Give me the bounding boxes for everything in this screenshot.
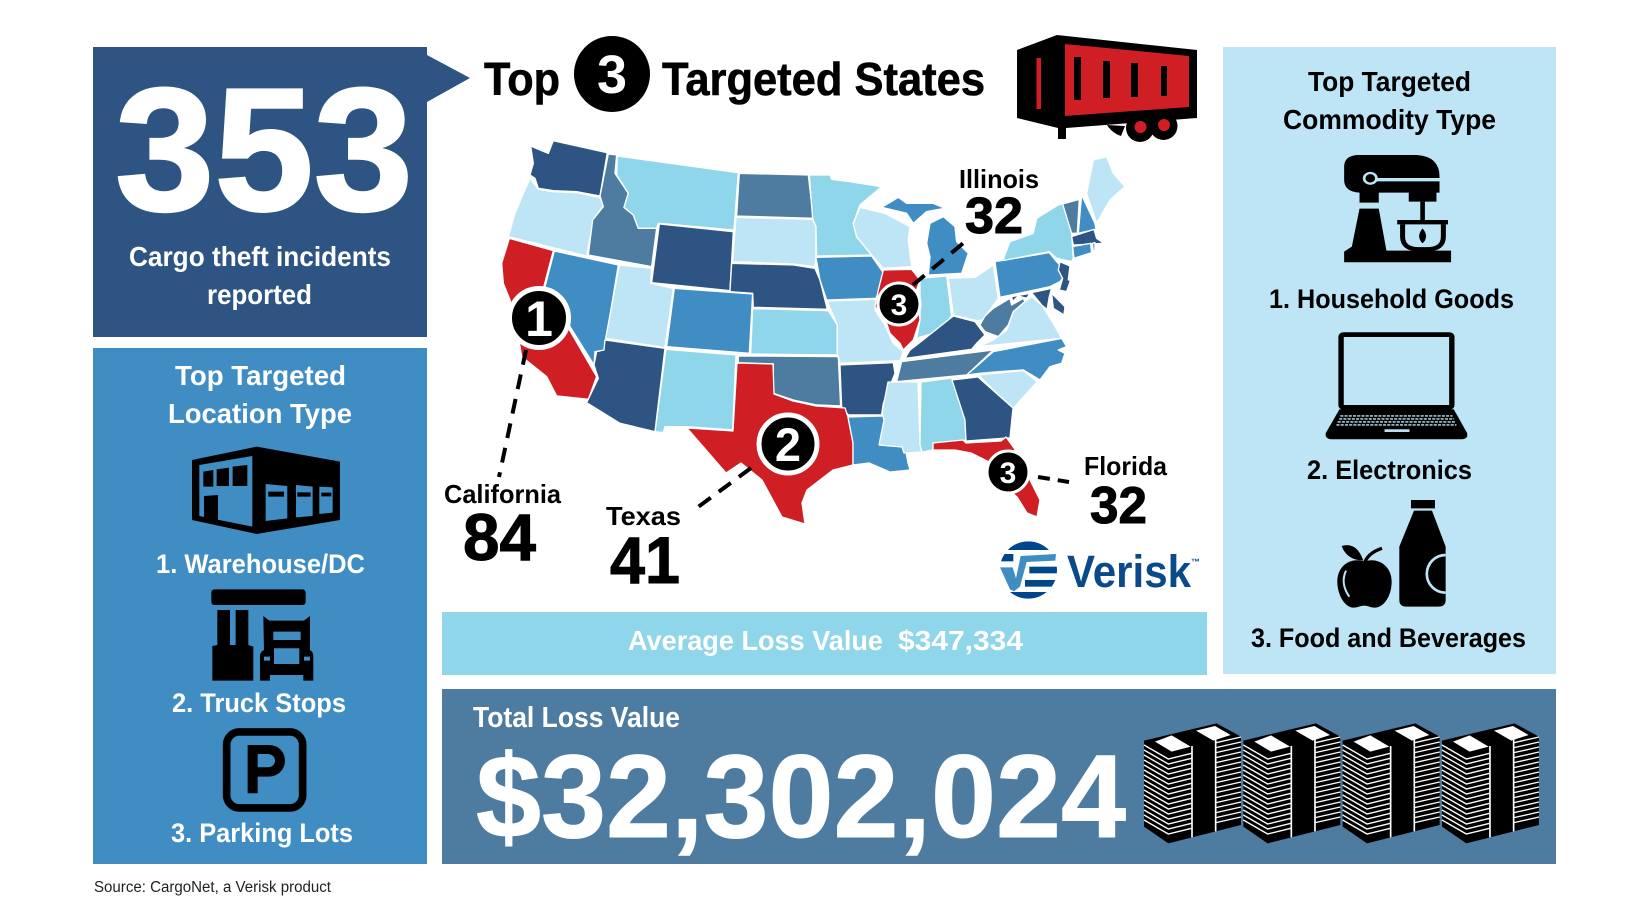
state: Kentucky [905,316,985,358]
commodity item 2: 2. Electronics [1307,455,1472,485]
callout: California: California [444,479,562,509]
state: Texas [687,363,853,524]
leader line: Florida [1038,477,1069,482]
callout: Florida: 32 [1090,477,1147,535]
state: New Hampshire [1078,195,1096,233]
callout: Texas: 41 [610,523,680,597]
state: Oklahoma [738,356,841,406]
callout: Florida [1084,451,1168,535]
state: New Mexico [655,349,736,433]
callout: Texas: Texas [606,501,681,531]
callout: Florida: Florida [1084,451,1168,481]
state: Wyoming [652,224,733,291]
title number badge: 3 [597,45,627,105]
state: Nebraska [730,263,827,309]
state: Florida [933,437,1040,517]
panel: average loss value [442,612,1207,675]
panel: top targeted commodity type [1223,47,1556,674]
location heading: Top Targeted [175,360,346,391]
incidents caption: Cargo theft incidents [129,241,391,272]
icon: laptop [1326,335,1467,439]
state: Colorado [667,288,753,353]
state: Rhode Island [1092,243,1095,251]
map of US states [502,141,1125,524]
location heading: Location Type [168,398,352,429]
icon: apple and bottle [1337,500,1446,608]
state: South Carolina [978,371,1037,408]
rank badge: Texas 2 [759,415,817,473]
state: Arizona [587,340,665,432]
state: West Virginia [980,298,1025,337]
icon: cargo trailer [1017,35,1197,142]
callout: Illinois [959,164,1039,244]
total label: Total Loss Value [473,702,680,734]
commodity heading: Commodity Type [1283,104,1496,135]
icon: warehouse [192,447,340,534]
state: Virginia [978,297,1062,347]
rank badge: California 1: 1 [525,291,553,347]
state: South Dakota [733,217,816,267]
source note: Source: CargoNet, a Verisk product [94,879,332,896]
commodity item 3: 3. Food and Beverages [1251,623,1526,653]
commodity item 1: 1. Household Goods [1269,284,1514,314]
state: Vermont [1063,199,1079,233]
title [484,36,985,112]
leader line: California [499,350,526,477]
rank badge: Illinois 3: 3 [891,289,907,322]
panel: 353 incidents [93,47,470,337]
big number 353: 353 [115,53,413,248]
rank badge: Illinois 3 [878,283,920,325]
rank badge: California 1 [510,288,568,348]
callout: Illinois: Illinois [959,164,1039,194]
state: Iowa [816,256,885,300]
state: Massachusetts [1072,229,1104,245]
Verisk logo [997,541,1200,600]
location item 3: 3. Parking Lots [171,818,353,848]
logo wordmark: Verisk [1067,546,1192,597]
location item 1: 1. Warehouse/DC [156,549,365,579]
state: Tennessee [897,350,993,382]
state: North Carolina [967,338,1067,380]
state: Michigan lower [927,217,968,275]
callout: California: 84 [463,500,536,574]
icon: parking [227,732,303,808]
total amount: $32,302,024 [476,731,1126,863]
state: Georgia [952,377,1013,441]
state: Ohio [948,265,998,321]
state: Minnesota [809,175,882,256]
state: Delaware peninsula [1052,293,1065,315]
logo mark [1000,541,1057,599]
state: Missouri [827,299,903,363]
incidents caption: reported [207,279,312,310]
rank badge: Texas 2: 2 [775,418,801,471]
state: Long Island [1072,257,1087,267]
state: Nevada [545,251,618,365]
state: Washington [530,141,607,196]
icon: stand mixer [1344,155,1451,262]
panel: top targeted location type [93,348,427,864]
state: Idaho [588,154,657,267]
rank badge: Florida 3: 3 [1000,457,1016,490]
location item 2: 2. Truck Stops [172,688,346,718]
leader line: Illinois [913,240,967,285]
panel: total loss value [442,689,1556,864]
state: Alabama [920,378,967,452]
commodity heading: Top Targeted [1308,66,1471,97]
state: New Jersey [1058,262,1071,292]
icon: money stacks [1144,723,1539,843]
title number badge [574,36,650,112]
state: Oregon [508,178,603,256]
rank badge: Florida 3 [987,451,1029,493]
state: Michigan upper [882,197,945,223]
title word Top: Top [484,53,560,105]
state: Kansas [751,309,837,355]
state: Arkansas [840,363,895,415]
state: North Dakota [737,173,813,218]
panel: average loss value: $347,334 [898,625,1023,656]
icon: truck stop [211,589,313,681]
state: Mississippi [879,382,922,453]
state: Indiana [917,276,952,338]
callout: Illinois: 32 [965,187,1023,244]
state: California [502,238,597,399]
state: Connecticut [1073,243,1092,258]
state: Maryland [1012,288,1052,313]
panel: average loss value: Average Loss Value [628,625,883,656]
state: Utah [606,265,673,348]
leader line: Texas [694,468,751,510]
trademark: ™ [1191,557,1200,567]
state: Maine [1087,157,1125,223]
state: Illinois [875,269,920,350]
callout: California [444,479,562,574]
state: New York [1003,203,1073,262]
state: Wisconsin [853,207,912,268]
state: Louisiana [848,416,910,472]
state: Montana [617,156,738,230]
title words Targeted States: Targeted States [662,53,985,105]
state: Pennsylvania [995,253,1063,297]
